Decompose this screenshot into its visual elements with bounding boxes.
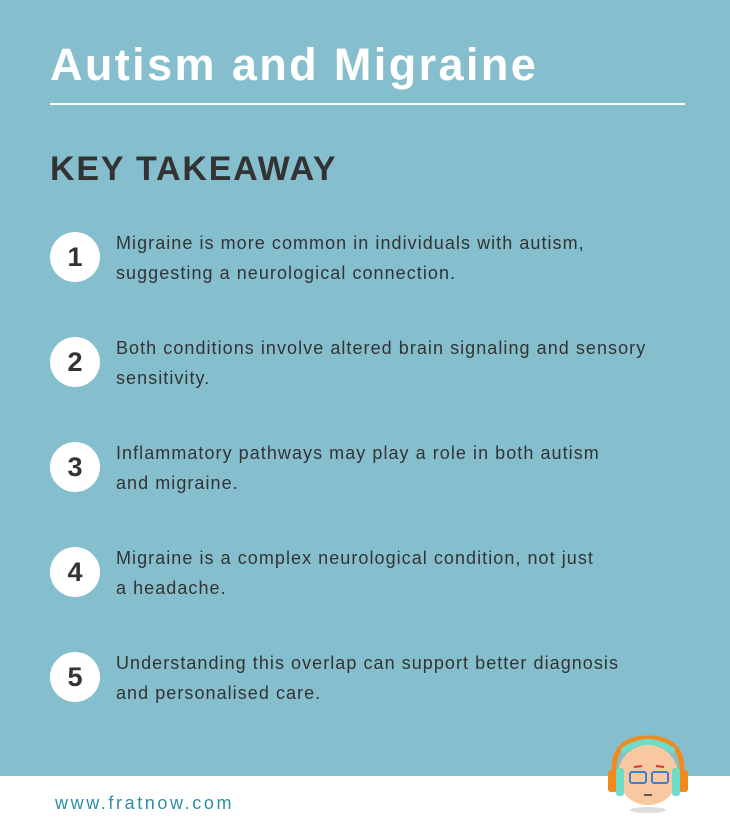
item 5: Understanding this overlap can support better diagnosis — [116, 653, 619, 673]
footer url: www.fratnow.com — [55, 793, 234, 813]
item 1: suggesting a neurological connection. — [116, 263, 456, 283]
item 2: sensitivity. — [116, 368, 210, 388]
item 2 — [50, 337, 646, 388]
title: Autism and Migraine — [50, 39, 538, 90]
heading: key takeaway: KEY TAKEAWAY — [50, 150, 337, 188]
item 4: Migraine is a complex neurological condition, not just — [116, 548, 594, 568]
item 5 — [50, 652, 619, 703]
item 5: and personalised care. — [116, 683, 321, 703]
icon: avatar with headphones — [608, 736, 688, 813]
item 3: 3 — [67, 452, 83, 482]
item 1: Migraine is more common in individuals with autism, — [116, 233, 585, 253]
item 1: 1 — [67, 242, 83, 272]
item 3: and migraine. — [116, 473, 239, 493]
item 3 — [50, 442, 600, 493]
item 3: Inflammatory pathways may play a role in both autism — [116, 443, 600, 463]
item 1 — [50, 232, 585, 283]
footer band — [0, 776, 730, 840]
item 2: Both conditions involve altered brain signaling and sensory — [116, 338, 646, 358]
item 5: 5 — [67, 662, 83, 692]
item 4: a headache. — [116, 578, 227, 598]
item 4: 4 — [67, 557, 83, 587]
item 4 — [50, 547, 594, 598]
item 2: 2 — [67, 347, 83, 377]
